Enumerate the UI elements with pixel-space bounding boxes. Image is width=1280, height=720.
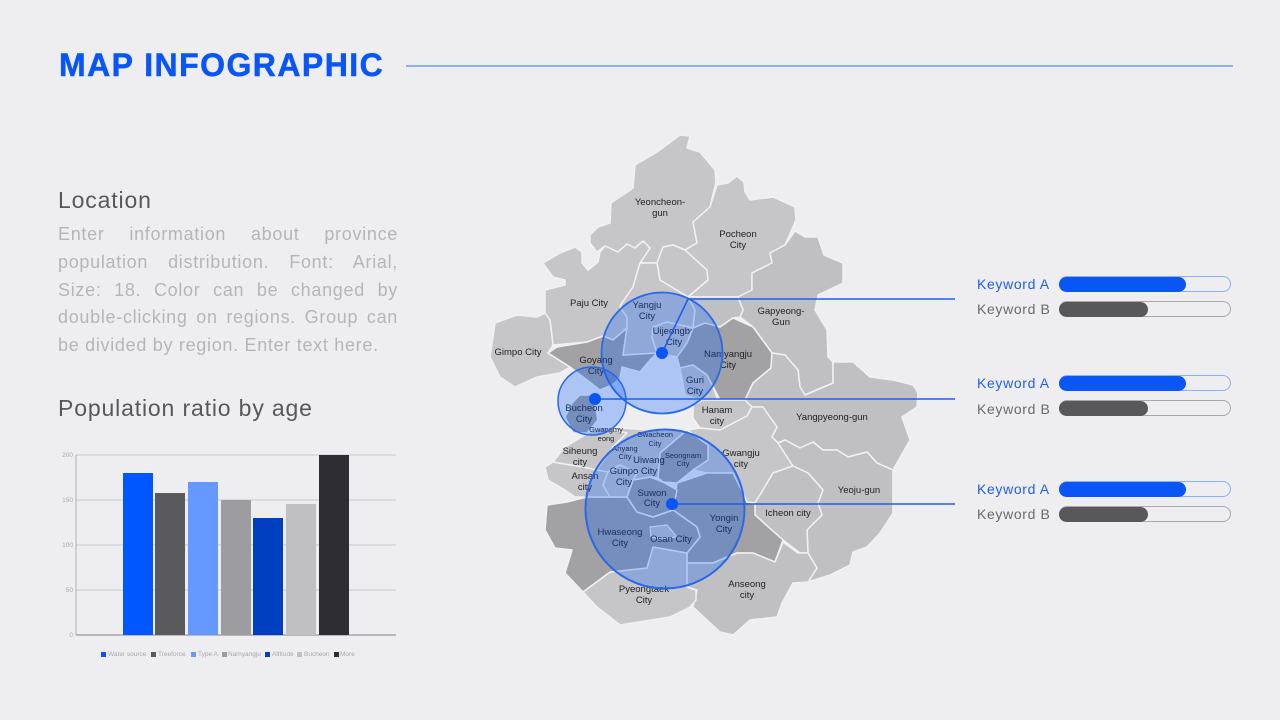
region: Ansan city: city	[578, 482, 592, 493]
region: Yeoncheon-gun	[590, 135, 716, 263]
region: Pyeongtaek City	[583, 547, 696, 625]
region: Gimpo City: Gimpo City	[495, 347, 542, 358]
region: Anseong city	[687, 542, 817, 635]
region: Uijeongbu City: Uijeongbu	[653, 326, 695, 337]
region: Namyangju City: Namyangju	[704, 349, 752, 360]
title: MAP INFOGRAPHIC	[59, 47, 384, 83]
region: Gwacheon, Anyang, Uiwang	[597, 427, 687, 480]
region: Yeoju-gun	[778, 440, 893, 582]
region: Guri City	[680, 365, 718, 400]
bar chart: population ratio by age: Altitude	[272, 651, 294, 658]
bar chart: population ratio by age: Type A	[198, 651, 219, 658]
region: Uijeongbu City	[652, 322, 695, 357]
label: Gwangmyeong: eong	[598, 434, 614, 443]
region: Gunpo City	[603, 465, 638, 497]
bar chart: population ratio by age: Water source	[108, 651, 147, 658]
location description text: be divided by region. Enter text here.	[58, 335, 379, 355]
region: Paju City	[543, 241, 650, 345]
region: Hwaseong City: Hwaseong	[598, 527, 642, 538]
region: Gwangju City: city	[734, 459, 748, 470]
region: Goyang City	[548, 328, 657, 390]
region: Gapyeong-Gun: Gun	[772, 317, 790, 328]
region: Osan City	[650, 525, 692, 545]
region: Paju City: Paju City	[570, 298, 608, 309]
region: Seongnam City	[658, 430, 708, 483]
region: Gunpo City: Gunpo	[610, 466, 638, 477]
keyword group 2	[977, 375, 1231, 417]
region: Gapyeong-Gun	[738, 231, 843, 395]
region: Hwaseong City	[545, 497, 700, 592]
keyword A bar	[1059, 375, 1231, 391]
region: Dongducheon	[657, 245, 708, 297]
region: Siheung city: city	[573, 457, 587, 468]
region: Pyeongtaek City: Pyeongtaek	[619, 584, 669, 595]
region: Siheung city	[553, 427, 627, 470]
region: Guri City: Guri	[686, 375, 704, 386]
highlight circle: north	[602, 292, 722, 414]
location description text	[58, 224, 398, 355]
region: Hanam City	[693, 400, 752, 430]
label: Gwangmyeong: Gwangmy	[589, 425, 623, 434]
keyword A label: Keyword A	[977, 375, 1050, 391]
region: Yangpyeong-gun: Yangpyeong-gun	[796, 412, 868, 423]
region: Bucheon City: City	[576, 414, 592, 425]
keyword A bar	[1059, 276, 1231, 292]
region: Yongin City: City	[716, 524, 732, 535]
region: Gunpo City: City	[616, 477, 632, 488]
region: Pocheon City: City	[730, 240, 746, 251]
region: Ansan city: Ansan	[572, 471, 598, 482]
keyword B bar	[1059, 400, 1231, 416]
bar chart: population ratio by age: More	[340, 651, 355, 658]
keyword B bar	[1059, 506, 1231, 522]
region: Pocheon City: Pocheon	[719, 229, 757, 240]
region: Uijeongbu City: City	[666, 337, 682, 348]
location description text: Enter information about province	[58, 224, 398, 244]
keyword B label: Keyword B	[977, 401, 1051, 417]
region: Bucheon City: Bucheon	[565, 403, 603, 414]
region: Yongin City	[673, 473, 783, 563]
keyword B label: Keyword B	[977, 301, 1051, 317]
region: Hanam City: city	[710, 416, 724, 427]
region: Yangju City: Yangju	[633, 300, 661, 311]
region: Pocheon City	[685, 176, 796, 297]
region: Suwon City: Suwon	[637, 488, 667, 499]
highlight circle: west	[558, 367, 626, 435]
bar chart: population ratio by age: Treeforce	[158, 651, 186, 658]
region: Guri City: City	[687, 386, 703, 397]
region: Yeoncheon-gun: Yeoncheon-	[635, 197, 685, 208]
region: Seongnam City: City	[677, 459, 690, 468]
region: Icheon city: Icheon city	[765, 508, 811, 519]
keyword A label: Keyword A	[977, 276, 1050, 292]
region: Gwacheon, Anyang, Uiwang: City	[649, 439, 662, 448]
region: Yongin City: Yongin	[710, 513, 738, 524]
bar chart: population ratio by age	[62, 452, 396, 658]
label: Gwangmyeong	[589, 425, 623, 443]
region: Gwacheon, Anyang, Uiwang: Anyang	[612, 444, 638, 453]
region: Yeoju-gun: Yeoju-gun	[838, 485, 880, 496]
keyword group 1	[977, 276, 1231, 317]
region: Osan City: Osan City	[650, 534, 692, 545]
region: Pyeongtaek City: City	[636, 595, 652, 606]
region: Gimpo City	[490, 313, 570, 387]
region: Hwaseong City: City	[612, 538, 628, 549]
bar chart: population ratio by age: Namyangju	[228, 651, 261, 658]
bar chart: population ratio by age: Bucheon	[304, 651, 330, 658]
bar chart: population ratio by age: 0	[69, 632, 73, 639]
location description text: double-clicking on regions. Group can	[58, 307, 398, 327]
region: Anseong city: city	[740, 590, 754, 601]
region: Yangpyeong-gun	[745, 353, 918, 470]
region: Gwacheon, Anyang, Uiwang: Uiwang	[633, 455, 665, 466]
connector: north circle to keywords	[656, 299, 955, 359]
region: Goyang City: Goyang	[579, 355, 613, 366]
bar chart: population ratio by age: 100	[62, 542, 73, 549]
keyword B bar	[1059, 301, 1231, 317]
connector: west circle to keywords	[589, 393, 955, 405]
region: Suwon City: City	[644, 498, 660, 509]
keyword A label: Keyword A	[977, 481, 1050, 497]
heading: location: Location	[58, 187, 152, 213]
region: Ansan city	[545, 462, 610, 497]
keyword B label: Keyword B	[977, 506, 1051, 522]
highlight circle: south	[586, 430, 744, 588]
title rule	[406, 65, 1233, 67]
region: Gwacheon, Anyang, Uiwang: Gwacheon	[637, 430, 673, 439]
region: Bucheon City	[565, 395, 603, 433]
bar chart: population ratio by age: 200	[62, 452, 73, 459]
region: Hanam City: Hanam	[702, 405, 732, 416]
region: Gwangju City: Gwangju	[722, 448, 760, 459]
keyword A bar	[1059, 481, 1231, 497]
keyword group 3	[977, 481, 1231, 522]
region: Siheung city: Siheung	[563, 446, 597, 457]
region: Seongnam City: Seongnam	[665, 451, 701, 460]
region: Anseong city: Anseong	[728, 579, 766, 590]
location description text: Size: 18. Color can be changed by	[58, 280, 398, 300]
location description text: population distribution. Font: Arial,	[58, 252, 398, 272]
region: Gapyeong-Gun: Gapyeong-	[757, 306, 805, 317]
region: Namyangju City: City	[720, 360, 736, 371]
connector: south circle to keywords	[666, 498, 955, 510]
region: Gwacheon, Anyang, Uiwang: City	[619, 452, 632, 461]
region: Goyang City: City	[588, 366, 604, 377]
region: Icheon city	[755, 466, 823, 553]
heading: population ratio by age: Population ratio by age	[58, 395, 313, 421]
region: Yangju City: City	[639, 311, 655, 322]
bar chart: population ratio by age: 50	[66, 587, 73, 594]
region: Namyangju north	[688, 297, 743, 328]
bar chart: population ratio by age: 150	[62, 497, 73, 504]
region: Suwon City	[627, 477, 677, 517]
region: Yeoncheon-gun: gun	[652, 208, 668, 219]
region: Gwacheon, Anyang, Uiwang: City	[641, 466, 657, 477]
region: Namyangju City	[677, 318, 772, 400]
region: Gwangju City	[687, 407, 793, 503]
region: Yangju City	[620, 263, 695, 355]
